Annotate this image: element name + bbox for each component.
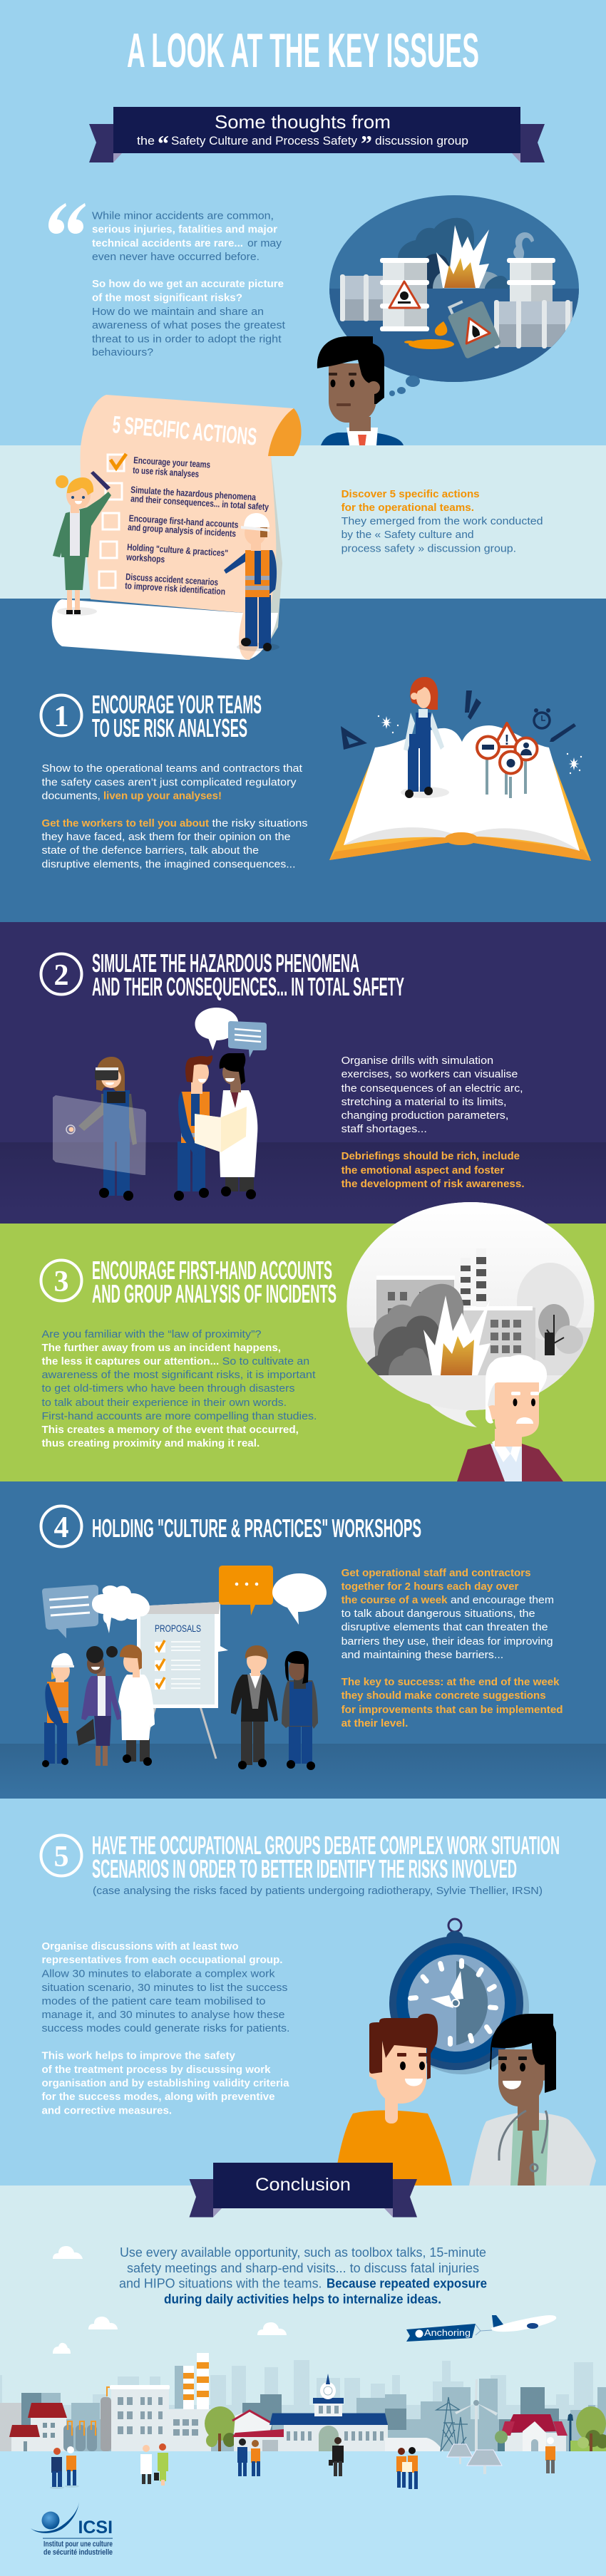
- actions intro text: Discover 5 specific actions: [341, 488, 480, 500]
- checklist text: Holding "culture & practices": [127, 542, 228, 559]
- tree: [538, 1304, 583, 1355]
- section 1 text: liven up your analyses!: [103, 790, 222, 802]
- section 5 text: success modes could generate risks for patients.: [41, 2022, 289, 2034]
- section 2 text: [341, 1055, 525, 1190]
- section 4 text: [341, 1567, 563, 1729]
- thought bubble illustration: hazards: [328, 195, 581, 396]
- checklist text: workshops: [125, 552, 165, 564]
- checklist text: and group analysis of incidents: [128, 522, 236, 539]
- icon: pen: [550, 723, 576, 742]
- banner: some thoughts: [89, 107, 545, 162]
- warning signs: !: [505, 733, 509, 748]
- right house: [495, 2414, 568, 2451]
- flipchart: proposals: PROPOSALS: [155, 1623, 201, 1634]
- logo: ICSI: ICSI: [78, 2518, 113, 2538]
- plane with anchoring banner: Anchoring: [424, 2327, 471, 2338]
- section 2 text: the development of risk awareness.: [341, 1178, 525, 1190]
- dark skyline: [0, 2387, 559, 2436]
- section 4 text: disruptive elements that can threaten the: [341, 1621, 548, 1633]
- explosion: [423, 1295, 491, 1375]
- section 3 text: Are you familiar with the “law of proximity”?: [41, 1328, 261, 1340]
- section 3 text: First-hand accounts are more compelling than studies.: [41, 1410, 317, 1422]
- character: doctor with plan: [195, 1053, 257, 1199]
- background: section 2 band: [0, 922, 606, 1224]
- banner: some thoughts: discussion group: [375, 134, 468, 148]
- section 3 text: So to cultivate an: [222, 1355, 309, 1367]
- section 3 text: [41, 1328, 317, 1449]
- warning signs: [477, 723, 538, 798]
- section 1 text: the safety cases aren’t just complicated regulatory: [41, 776, 297, 788]
- section 3 text: This creates a memory of the event that occurred,: [41, 1424, 299, 1436]
- intro text block: technical accidents are rare...: [92, 237, 243, 249]
- section 2 text: staff shortages...: [341, 1123, 427, 1135]
- background: section 4 band: [0, 1481, 606, 1799]
- icon: opening quote: [48, 203, 86, 234]
- banner: some thoughts: “: [158, 130, 169, 156]
- character: woman with VR headset: [53, 1057, 146, 1201]
- centre barrel: [380, 258, 429, 331]
- logo: ICSI: Institut pour une culture: [43, 2540, 113, 2548]
- intro text block: of the most significant risks?: [92, 292, 242, 304]
- section 5 text: manage it, and 30 minutes to analyse how these: [41, 2009, 285, 2021]
- actions intro text: They emerged from the work conducted: [341, 515, 543, 527]
- conclusion text: and HIPO situations with the teams.: [119, 2276, 322, 2290]
- left horizontal barrel: [340, 274, 384, 321]
- speech bubble: factory disaster memory: [342, 1201, 599, 1427]
- checklist text: Encourage your teams: [133, 455, 211, 470]
- section 5 text: Organise discussions with at least two: [41, 1940, 238, 1952]
- speech bubbles section 4: [42, 1566, 327, 1638]
- section 2 text: Debriefings should be rich, include: [341, 1150, 520, 1162]
- section 5 subtitle: (case analysing the risks faced by patients undergoing radiotherapy, Sylvie Thellier, IRSN): [93, 1885, 543, 1897]
- clouds: [53, 2246, 287, 2354]
- explosion: [436, 225, 489, 288]
- silos: [63, 2387, 115, 2451]
- icon: toxic warning: [389, 281, 420, 308]
- section 4 text: together for 2 hours each day over: [341, 1581, 519, 1593]
- section 4 heading: [41, 1506, 421, 1546]
- town people: worker: [545, 2437, 555, 2473]
- chimneys: [461, 1257, 486, 1308]
- section 2 text: stretching a material to its limits,: [341, 1096, 507, 1108]
- solar panels: [447, 2444, 502, 2474]
- intro text block: How do we maintain and share an: [92, 306, 264, 318]
- left houses: [9, 2403, 67, 2451]
- checklist text: to improve risk identification: [125, 580, 226, 597]
- conclusion text: Because repeated exposure: [327, 2276, 487, 2290]
- smoke cloud: [398, 218, 474, 267]
- scroll of 5 specific actions: [52, 395, 302, 660]
- section 1 heading: 1: [54, 700, 68, 733]
- right tree: [570, 2406, 606, 2451]
- background: section 1 band: [0, 599, 606, 922]
- section 4 heading: 4: [54, 1511, 68, 1544]
- section 3 heading: AND GROUP ANALYSIS OF INCIDENTS: [92, 1279, 337, 1308]
- section 1 text: disruptive elements, the imagined consequences...: [41, 859, 295, 871]
- character: old man: [457, 1355, 563, 1481]
- checklist text: Simulate the hazardous phenomena: [130, 485, 257, 502]
- character: woman in purple: [76, 1646, 121, 1766]
- checklist text: [125, 455, 269, 597]
- icon: alarm clock: [534, 708, 550, 728]
- conclusion text: safety meetings and sharp-end visits... to discuss fatal injuries: [127, 2261, 479, 2275]
- orange chimneys: [168, 2353, 211, 2451]
- section 1 heading: TO USE RISK ANALYSES: [92, 713, 247, 743]
- background: pale actions band: [0, 445, 606, 599]
- small red building: [232, 2411, 284, 2451]
- section 3 heading: 3: [54, 1266, 68, 1298]
- section 4 text: Get operational staff and contractors: [341, 1567, 531, 1579]
- scroll end: [268, 408, 302, 456]
- sparkles: [378, 715, 582, 774]
- section 4 text: for improvements that can be implemented: [341, 1704, 563, 1716]
- briefcase: [76, 1719, 95, 1746]
- thought dots: [389, 376, 420, 396]
- banner: some thoughts: ”: [361, 130, 372, 156]
- checklist text: Encourage first-hand accounts: [128, 513, 239, 530]
- section 5 text: of the treatment process by discussing work: [41, 2064, 271, 2076]
- section 1 text: state of the defence barriers, talk about the: [41, 844, 259, 857]
- character: woman in overalls: [282, 1651, 318, 1770]
- smoke hook: [513, 232, 534, 258]
- section 3 text: awareness of the most significant risks, it is important: [41, 1369, 316, 1381]
- checklist text: to use risk analyses: [133, 465, 200, 480]
- spill: [404, 321, 454, 349]
- banner: some thoughts: the: [137, 134, 155, 148]
- town people: group 3: [237, 2438, 260, 2476]
- icon: set square: [341, 726, 367, 750]
- section 5 heading: [41, 1831, 560, 1883]
- clock illustration: [389, 1919, 529, 2074]
- checklist boxes: [99, 455, 124, 588]
- actions intro text: [341, 488, 543, 554]
- actions intro text: by the « Safety culture and: [341, 529, 474, 541]
- section 4 text: the course of a week: [341, 1594, 448, 1606]
- section 3 text: to get old-timers who have been through disasters: [41, 1382, 295, 1395]
- section 4 text: to talk about dangerous situations, the: [341, 1608, 535, 1620]
- banner: some thoughts: Safety Culture and Process Safety: [171, 134, 357, 148]
- section 4 text: and encourage them: [451, 1594, 554, 1606]
- conclusion text: Use every available opportunity, such as toolbox talks, 15-minute: [120, 2245, 486, 2260]
- town people: businessman: [329, 2437, 344, 2476]
- intro text block: behaviours?: [92, 346, 153, 358]
- character: worker in helmet: [224, 513, 279, 651]
- text: ENCOURAGE YOUR TEAMS: [92, 690, 262, 719]
- actions intro text: process safety » discussion group.: [341, 543, 516, 554]
- section 5 text: organisation and by establishing validity criteria: [41, 2077, 289, 2089]
- section 1 text: they have faced, ask them for their opinion on the: [41, 831, 290, 843]
- grey office far left: [0, 2403, 21, 2451]
- section 5 text: representatives from each occupational group.: [41, 1954, 283, 1966]
- right upright barrel: [507, 258, 555, 304]
- section 3 heading: ENCOURAGE FIRST-HAND ACCOUNTS: [92, 1256, 332, 1285]
- smoke: [364, 1284, 463, 1375]
- section 5 heading: 5: [54, 1841, 68, 1873]
- section 2 text: the consequences of an electric arc,: [341, 1082, 523, 1095]
- right horizontal barrel: [494, 300, 572, 348]
- scroll heading: 5 SPECIFIC ACTIONS: [111, 411, 258, 451]
- section 5 text: [41, 1940, 289, 2117]
- ground: [0, 2451, 606, 2576]
- section 2 heading: [41, 948, 404, 1001]
- section 4 text: The key to success: at the end of the week: [341, 1676, 560, 1688]
- town people: group 1: [50, 2446, 79, 2489]
- plane with anchoring banner: [406, 2315, 556, 2342]
- scroll shading: [242, 456, 282, 648]
- scroll body: [81, 395, 294, 660]
- checklist text: Discuss accident scenarios: [125, 571, 218, 588]
- lamp post: [568, 2414, 573, 2451]
- section 1 text: the risky situations: [212, 817, 308, 829]
- intro text block: serious injuries, fatalities and major: [92, 224, 277, 235]
- mid skyline: [0, 2366, 606, 2451]
- conclusion section background: [0, 2186, 606, 2451]
- section 2 text: the emotional aspect and foster: [341, 1164, 504, 1176]
- section 1 text: [41, 762, 308, 871]
- train: [385, 2438, 443, 2451]
- banner: conclusion: Conclusion: [255, 2175, 351, 2195]
- intro text block: even never have occurred before.: [92, 251, 260, 263]
- section 5 text: modes of the patient care team mobilised to: [41, 1995, 265, 2007]
- paper plan: [195, 1107, 247, 1152]
- background: section 3 band: [0, 1224, 606, 1481]
- conclusion text: during daily activities helps to internalize ideas.: [164, 2292, 441, 2306]
- section 5 text: for the success modes, along with preventive: [41, 2091, 275, 2103]
- section 3 text: The further away from us an incident happens,: [41, 1342, 281, 1354]
- town people: group 2: [140, 2443, 168, 2486]
- character: worker with helmet: [42, 1653, 74, 1767]
- logo: ICSI: de sécurité industrielle: [43, 2548, 113, 2557]
- section 4 text: and maintaining these barriers...: [341, 1649, 503, 1661]
- check mark: [111, 454, 126, 468]
- jerry can with flame sign: [444, 294, 501, 359]
- speech bubbles section 2: [195, 1008, 267, 1057]
- transparent screen: [53, 1095, 146, 1175]
- town people: group 4: [396, 2447, 418, 2489]
- intro text block: threat to us in order to adopt the right: [92, 333, 282, 345]
- section 5 text: and corrective measures.: [41, 2105, 172, 2117]
- section 3 text: to talk about their experience in their own words.: [41, 1397, 287, 1409]
- intro text block: or may: [247, 237, 282, 249]
- section 2 text: exercises, so workers can visualise: [341, 1068, 518, 1080]
- section 1 text: Get the workers to tell you about: [41, 817, 209, 829]
- section 2 text: changing production parameters,: [341, 1109, 508, 1122]
- open book illustration: [329, 677, 591, 861]
- conclusion text: [119, 2245, 487, 2306]
- icon: pencils: [465, 690, 481, 720]
- section 5 text: This work helps to improve the safety: [41, 2049, 236, 2062]
- section 4 text: barriers they use, their ideas for improving: [341, 1635, 553, 1647]
- section 4 text: they should make concrete suggestions: [341, 1690, 546, 1702]
- section 1 text: Show to the operational teams and contractors that: [41, 762, 303, 775]
- flipchart: proposals: [137, 1602, 228, 1759]
- background: section 5 band: [0, 1799, 606, 2186]
- wind turbine: [455, 2379, 498, 2451]
- background: sky top: [0, 0, 606, 445]
- banner: some thoughts: Some thoughts from: [215, 111, 391, 133]
- far skyline: [0, 2360, 606, 2451]
- woman in overalls: [401, 677, 449, 798]
- section 5 text: situation scenario, 30 minutes to list the success: [41, 1982, 288, 1994]
- logo: ICSI: [31, 2502, 113, 2557]
- section 3 text: the less it captures our attention...: [41, 1355, 219, 1367]
- character: man in orange: [334, 2014, 452, 2186]
- white factory: [110, 2385, 170, 2451]
- section 1 heading: [41, 690, 262, 743]
- factory buildings: [376, 1276, 535, 1375]
- checklist text: and their consequences... in total safety: [130, 493, 269, 512]
- actions intro text: for the operational teams.: [341, 502, 474, 514]
- section 1 text: documents,: [41, 790, 101, 802]
- character: doctor in white: [118, 1645, 155, 1766]
- skyline and town: [0, 2353, 606, 2474]
- section 4 text: at their level.: [341, 1717, 408, 1729]
- character: thinking man: [317, 336, 404, 445]
- scroll roll: [52, 599, 278, 660]
- section 3 text: thus creating proximity and making it real.: [41, 1437, 260, 1449]
- character: woman with pencil: [53, 471, 111, 616]
- section 2 heading: 2: [54, 959, 68, 992]
- character: man in suit: [231, 1645, 278, 1769]
- left tree: [205, 2406, 236, 2451]
- intro text block: [92, 210, 286, 358]
- intro text block: While minor accidents are common,: [92, 210, 274, 222]
- intro text block: awareness of what poses the greatest: [92, 319, 286, 331]
- section 2 text: Organise drills with simulation: [341, 1055, 493, 1067]
- character: worker in vest: [174, 1055, 212, 1201]
- character: doctor with stethoscope: [469, 2014, 596, 2186]
- section 5 text: Allow 30 minutes to elaborate a complex work: [41, 1968, 275, 1980]
- banner: conclusion: [190, 2163, 417, 2218]
- pylons: [436, 2397, 468, 2451]
- section 3 heading: [41, 1256, 337, 1308]
- intro text block: So how do we get an accurate picture: [92, 278, 284, 290]
- town hall: [269, 2374, 388, 2451]
